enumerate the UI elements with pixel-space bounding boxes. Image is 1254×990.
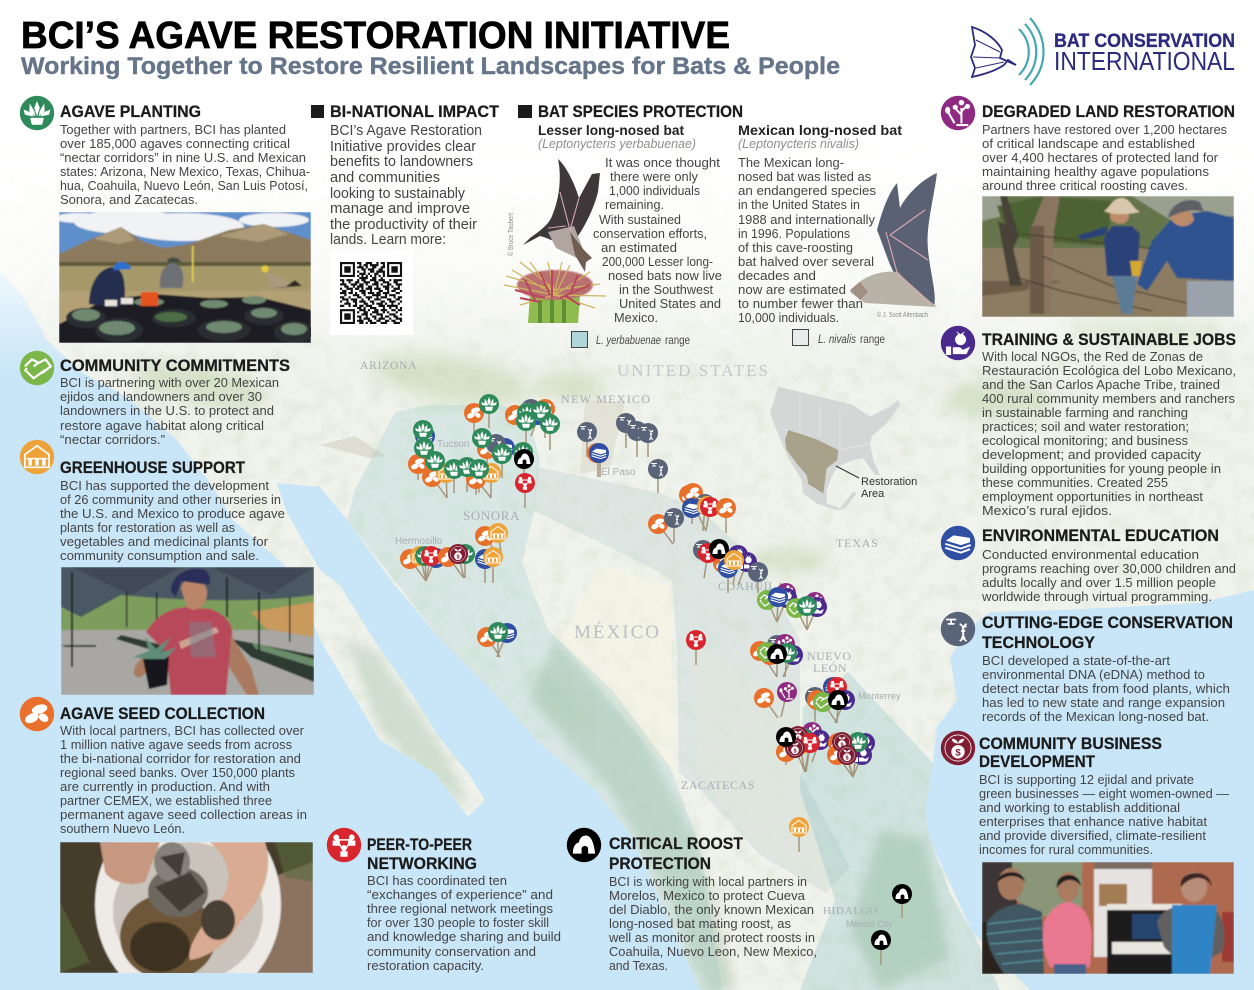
text: bi-national impact: looking to sustainably [330, 186, 466, 202]
legend: L. yerbabuenae range: L. yerbabuenae [596, 333, 661, 347]
text: bi-national impact: and communities [330, 170, 440, 186]
text: peer-to-peer networking: and knowledge sharing and build [367, 929, 561, 944]
text: mexican long-nosed bat: in the United States in [738, 197, 860, 212]
icon: square bullet [518, 105, 532, 118]
heading: greenhouse support: GREENHOUSE SUPPORT [60, 458, 246, 477]
text: critical roost protection: Coahuila, Nuevo Leon, New Mexico, [609, 944, 817, 959]
text: agave seed collection: permanent agave seed collection areas in [60, 807, 307, 822]
text: community business development: and provide diversified, climate-resilient [979, 828, 1206, 843]
text: lesser long-nosed bat: there were only [610, 169, 698, 184]
map labels: HIDALGO [823, 905, 878, 917]
panel: agave seed collection [20, 697, 313, 990]
text: agave planting: “nectar corridors” in nine U.S. and Mexican [60, 150, 306, 165]
text: critical roost protection: del Diablo, the only known Mexican [609, 902, 814, 917]
text: degraded land restoration: around three critical roosting caves. [982, 178, 1188, 193]
icon: greenhouse [20, 440, 54, 474]
text: greenhouse support: plants for restoration as well as [60, 520, 235, 535]
text: mexican long-nosed bat [738, 155, 876, 325]
map labels [360, 360, 901, 929]
text: community commitments [60, 375, 279, 447]
text: bi-national impact: lands. Learn more: [330, 232, 446, 248]
map labels: Hermosillo [395, 536, 443, 547]
legend: L. nivalis range [792, 330, 885, 346]
logo: Bat Conservation International: BAT CONSERVATION [1054, 30, 1235, 52]
text: critical roost protection: well as monitor and protect roosts in [608, 930, 815, 945]
heading: critical roost protection: CRITICAL ROOST [609, 834, 744, 853]
text: training and sustainable jobs: With local NGOs, the Red de Zonas de [982, 349, 1203, 364]
panel: community commitments [20, 351, 290, 447]
text: lesser long-nosed bat: 200,000 Lesser long- [602, 254, 713, 269]
panel: agave planting [20, 96, 314, 343]
text: agave seed collection [60, 723, 307, 836]
text: agave planting [60, 122, 310, 207]
panel: greenhouse support [20, 440, 314, 695]
text: training and sustainable jobs: employment opportunities in northeast [982, 489, 1203, 504]
text: conservation technology: BCI developed a state-of-the-art [982, 653, 1170, 668]
panel: critical roost protection [567, 828, 817, 973]
text: agave planting: Together with partners, BCI has planted [60, 122, 286, 137]
heading: peer-to-peer networking: PEER-TO-PEER [367, 835, 472, 854]
range overlays [347, 405, 1000, 990]
subheading: lesser long-nosed bat [538, 122, 696, 151]
text: greenhouse support: of 26 community and other nurseries in [60, 492, 281, 507]
heading: community commitments: COMMUNITY COMMITMENTS [60, 356, 290, 375]
text: agave planting: Sonora, and Zacatecas. [60, 192, 198, 207]
text: environmental education: worldwide through virtual programming. [981, 589, 1212, 604]
legend: L. yerbabuenae range [572, 332, 690, 348]
text: training and sustainable jobs [982, 349, 1236, 518]
text: training and sustainable jobs: 400 rural community members and ranchers [982, 391, 1235, 406]
text: community business development: green businesses — eight women-owned — [979, 786, 1229, 801]
QR code [330, 251, 413, 335]
map pins: Sonora [400, 523, 517, 657]
text: training and sustainable jobs: Mexico’s rural ejidos. [982, 503, 1112, 518]
heading: critical roost protection: PROTECTION [609, 854, 711, 873]
heading: bi-national impact: BI-NATIONAL IMPACT [330, 102, 500, 121]
map labels: SONORA [463, 508, 520, 523]
panel: training and sustainable jobs [941, 326, 1236, 518]
text: community commitments: BCI is partnering with over 20 Mexican [60, 375, 279, 390]
text: agave seed collection: 1 million native agave seeds from across [60, 737, 292, 752]
text: community business development: enterprises that enhance native habitat [979, 814, 1207, 829]
photo credits: © J. Scott Altenbach [877, 311, 928, 319]
text: lesser long-nosed bat: United States and [619, 296, 721, 311]
heading: environmental education: ENVIRONMENTAL EDUCATION [982, 526, 1219, 545]
text: conservation technology [982, 653, 1230, 724]
photo credits: © Bruce Taubert [507, 213, 515, 256]
heading: degraded land restoration: DEGRADED LAND RESTORATION [982, 102, 1235, 121]
text: agave seed collection: southern Nuevo León. [60, 821, 185, 836]
text: mexican long-nosed bat: The Mexican long- [738, 155, 844, 170]
inset map: restoration area: Restoration [861, 476, 917, 488]
text: mexican long-nosed bat: of this cave-roosting [738, 240, 853, 255]
subheading: mexican long-nosed bat: (Leptonycteris nivalis) [738, 137, 859, 151]
map labels: TEXAS [836, 536, 879, 550]
text: training and sustainable jobs: and the San Carlos Apache Tribe, trained [982, 377, 1220, 392]
text: conservation technology: records of the Mexican long-nosed bat. [982, 709, 1209, 724]
text: mexican long-nosed bat: to number fewer than [738, 296, 863, 311]
heading: peer-to-peer networking: NETWORKING [367, 854, 477, 873]
legend: L. yerbabuenae range: range [665, 333, 690, 347]
text: community commitments: “nectar corridors.” [60, 432, 165, 447]
text: lesser long-nosed bat: conservation efforts, [593, 226, 707, 241]
text: lesser long-nosed bat: It was once thought [605, 155, 720, 170]
text: peer-to-peer networking: three regional network meetings [367, 901, 553, 916]
text: bi-national impact [330, 123, 482, 248]
text: community commitments: landowners in the U.S. to protect and [60, 403, 274, 418]
heading: community business development: DEVELOPMENT [979, 752, 1096, 771]
logo: Bat Conservation International [971, 18, 1235, 85]
text: lesser long-nosed bat: Mexico. [614, 310, 658, 325]
icon: seeds [20, 697, 54, 731]
text: mexican long-nosed bat: decades and [738, 268, 816, 283]
map labels: NEW MEXICO [561, 392, 650, 406]
text: training and sustainable jobs: Restauración Ecológica del Lobo Mexicano, [982, 363, 1236, 378]
photo: man holding agave in nursery [61, 567, 314, 695]
text: agave planting: states: Arizona, New Mexico, Texas, Chihua- [60, 164, 310, 179]
text: mexican long-nosed bat: bat halved over several [738, 254, 874, 269]
text: mexican long-nosed bat: 1988 and internationally [738, 212, 875, 227]
panel: bi-national impact [311, 102, 500, 335]
text: greenhouse support: the U.S. and Mexico to produce agave [60, 506, 285, 521]
map labels: COAHUILA [718, 579, 785, 593]
heading: bat species protection: BAT SPECIES PROTECTION [538, 102, 743, 121]
panel: community business development [941, 731, 1234, 974]
text: bi-national impact: manage and improve [330, 201, 470, 217]
icon: drone and DNA [941, 612, 975, 646]
text: agave seed collection: With local partners, BCI has collected over [60, 723, 305, 738]
text: conservation technology: detect nectar bats from food plants, which [982, 681, 1230, 696]
text: degraded land restoration: of critical landscape and established [982, 136, 1195, 151]
text: community business development: and working to establish additional [979, 800, 1180, 815]
map labels: ZACATECAS [681, 778, 755, 792]
map labels: ARIZONA [360, 360, 417, 372]
map labels: LEÓN [813, 661, 847, 675]
icon: handshake [20, 351, 54, 385]
text: greenhouse support: vegetables and medicinal plants for [60, 534, 269, 549]
photo: three women-owned business members [982, 862, 1234, 974]
text: lesser long-nosed bat: nosed bats now live [608, 268, 722, 283]
inset map: restoration area: Area [861, 488, 885, 500]
text: lesser long-nosed bat: 1,000 individuals [609, 183, 700, 198]
text: bi-national impact: benefits to landowners [330, 154, 473, 170]
text: lesser long-nosed bat: remaining. [605, 197, 664, 212]
text: mexican long-nosed bat: now are estimated [738, 282, 846, 297]
text: lesser long-nosed bat: an estimated [601, 240, 677, 255]
text: critical roost protection: long-nosed bat mating roost, as [609, 916, 791, 931]
text: critical roost protection [608, 874, 817, 973]
text: peer-to-peer networking [367, 873, 561, 973]
heading: cutting-edge conservation technology: CUTTING-EDGE CONSERVATION [982, 613, 1233, 632]
heading: peer-to-peer networking [367, 835, 477, 873]
photo: workers planting agaves [59, 212, 311, 343]
panel: environmental education [941, 526, 1236, 604]
title: BCI’S AGAVE RESTORATION INITIATIVE [21, 15, 730, 57]
text: agave planting: over 185,000 agaves connecting critical [60, 136, 290, 151]
illustration: mexican long-nosed bat [850, 173, 937, 307]
heading: community business development [979, 734, 1162, 771]
text: community commitments: restore agave habitat along critical [60, 418, 264, 433]
text: degraded land restoration: Partners have restored over 1,200 hectares [982, 122, 1227, 137]
text: training and sustainable jobs: practices; soil and water restoration; [982, 419, 1189, 434]
subheading: lesser long-nosed bat: Lesser long-nosed bat [538, 122, 684, 138]
icon: network of people [327, 828, 361, 862]
icon: tree and shovel [941, 96, 975, 130]
text: critical roost protection: Morelos, Mexico to protect Cueva [609, 888, 806, 903]
heading: agave planting: AGAVE PLANTING [60, 102, 201, 121]
photo: men repairing fence [982, 196, 1234, 317]
text: mexican long-nosed bat: an endangered species [738, 183, 876, 198]
subheading: lesser long-nosed bat: (Leptonycteris yerbabuenae) [538, 137, 696, 151]
map labels: El Paso [601, 467, 636, 478]
icon: stacked books [941, 526, 975, 560]
text: agave seed collection: are currently in production. And with [60, 779, 270, 794]
heading: critical roost protection [609, 834, 744, 873]
icon: money bag seal [941, 731, 975, 765]
text: greenhouse support [60, 478, 285, 563]
panel: peer-to-peer networking [327, 828, 561, 973]
subheading: mexican long-nosed bat [738, 122, 902, 151]
heading: training and sustainable jobs: TRAINING & SUSTAINABLE JOBS [982, 330, 1236, 349]
text: lesser long-nosed bat: With sustained [599, 212, 681, 227]
subtitle: Working Together to Restore Resilient Landscapes for Bats & People [21, 53, 840, 80]
heading: community business development: COMMUNITY BUSINESS [979, 734, 1162, 753]
text: training and sustainable jobs: development; and provided capacity [982, 447, 1202, 462]
text: environmental education: Conducted environmental education [982, 547, 1199, 562]
icon: agave plant [20, 96, 54, 130]
map pins: Arizona and New Mexico [408, 394, 560, 508]
text: training and sustainable jobs: in sustainable farming and ranching [982, 405, 1188, 420]
icon: hand with money bag [941, 326, 975, 360]
text: critical roost protection: and Texas. [609, 958, 668, 973]
illustration: lesser long-nosed bat on agave flower [504, 159, 606, 323]
icon: roost cave [567, 828, 601, 862]
text: critical roost protection: BCI is working with local partners in [609, 874, 807, 889]
text: agave seed collection: regional seed banks. Over 150,000 plants [60, 765, 295, 780]
text: agave seed collection: partner CEMEX, we established three [60, 793, 272, 808]
text: greenhouse support: BCI has supported the development [60, 478, 269, 493]
text: conservation technology: environmental DNA (eDNA) method to [982, 667, 1205, 682]
heading: agave seed collection: AGAVE SEED COLLECTION [60, 704, 265, 723]
text: bi-national impact: BCI’s Agave Restoration [330, 123, 482, 139]
photo: hands holding agave seeds [60, 842, 313, 973]
text: peer-to-peer networking: restoration capacity. [367, 958, 484, 973]
text: peer-to-peer networking: for over 130 people to foster skill [367, 915, 549, 930]
text: community business development: incomes for rural communities. [979, 842, 1153, 857]
text: environmental education [981, 547, 1236, 604]
text: lesser long-nosed bat: in the Southwest [619, 282, 713, 297]
text: agave planting: hua, Coahuila, Nuevo León, San Luis Potosí, [60, 178, 308, 193]
heading: cutting-edge conservation technology: TECHNOLOGY [982, 633, 1096, 652]
map labels: México City [846, 919, 893, 929]
map labels: UNITED STATES [617, 361, 768, 380]
legend: L. nivalis range: range [860, 332, 885, 346]
map labels: MÉXICO [574, 621, 659, 643]
map labels: NUEVO [807, 649, 852, 663]
text: mexican long-nosed bat: in 1996. Populations [738, 226, 850, 241]
text: degraded land restoration [982, 122, 1227, 193]
panel: degraded land restoration [941, 96, 1235, 317]
text: conservation technology: has led to new state and range expansion [982, 695, 1225, 710]
text: peer-to-peer networking: community conservation and [367, 944, 536, 959]
map pins: southern Nuevo Leon and Hidalgo [776, 722, 912, 965]
text: mexican long-nosed bat: nosed bat was listed as [738, 169, 871, 184]
heading: cutting-edge conservation technology [982, 613, 1233, 652]
text: bi-national impact: the productivity of their [330, 217, 477, 233]
text: greenhouse support: community consumption and sale. [60, 548, 259, 563]
map labels: Tucson [437, 439, 469, 450]
text: training and sustainable jobs: these communities. Created 255 [982, 475, 1168, 490]
map pins: Coahuila and Nuevo Leon [686, 583, 855, 723]
icon: square bullet [311, 105, 324, 118]
subheading: mexican long-nosed bat: Mexican long-nosed bat [738, 122, 902, 138]
map pins: New Mexico and Chihuahua [577, 413, 768, 593]
text: bi-national impact: Initiative provides clear [330, 139, 476, 155]
legend: L. nivalis range: L. nivalis [818, 332, 856, 346]
text: lesser long-nosed bat [593, 155, 722, 325]
text: training and sustainable jobs: ecological monitoring; and business [982, 433, 1188, 448]
text: community business development: BCI is supporting 12 ejidal and private [979, 772, 1194, 787]
panel: bat species protection [504, 102, 937, 348]
text: peer-to-peer networking: BCI has coordinated ten [367, 873, 507, 888]
photo credits [507, 213, 928, 319]
text: degraded land restoration: over 4,400 hectares of protected land for [982, 150, 1219, 165]
text: environmental education: programs reaching over 30,000 children and [982, 561, 1236, 576]
text: community business development [979, 772, 1229, 857]
map labels: Monterrey [858, 691, 901, 702]
text: mexican long-nosed bat: 10,000 individuals. [738, 310, 839, 325]
text: environmental education: adults locally and over 1.5 million people [982, 575, 1216, 590]
panel: cutting-edge conservation technology [941, 612, 1233, 724]
text: degraded land restoration: maintaining healthy agave populations [982, 164, 1209, 179]
text: community commitments: ejidos and landowners and over 30 [60, 389, 262, 404]
inset map: restoration area [770, 387, 917, 510]
text: agave seed collection: the bi-national corridor for restoration and [60, 751, 301, 766]
text: peer-to-peer networking: “exchanges of experience” and [367, 887, 553, 902]
logo: Bat Conservation International: INTERNATIONAL [1054, 46, 1235, 76]
text: training and sustainable jobs: building opportunities for young people in [982, 461, 1221, 476]
